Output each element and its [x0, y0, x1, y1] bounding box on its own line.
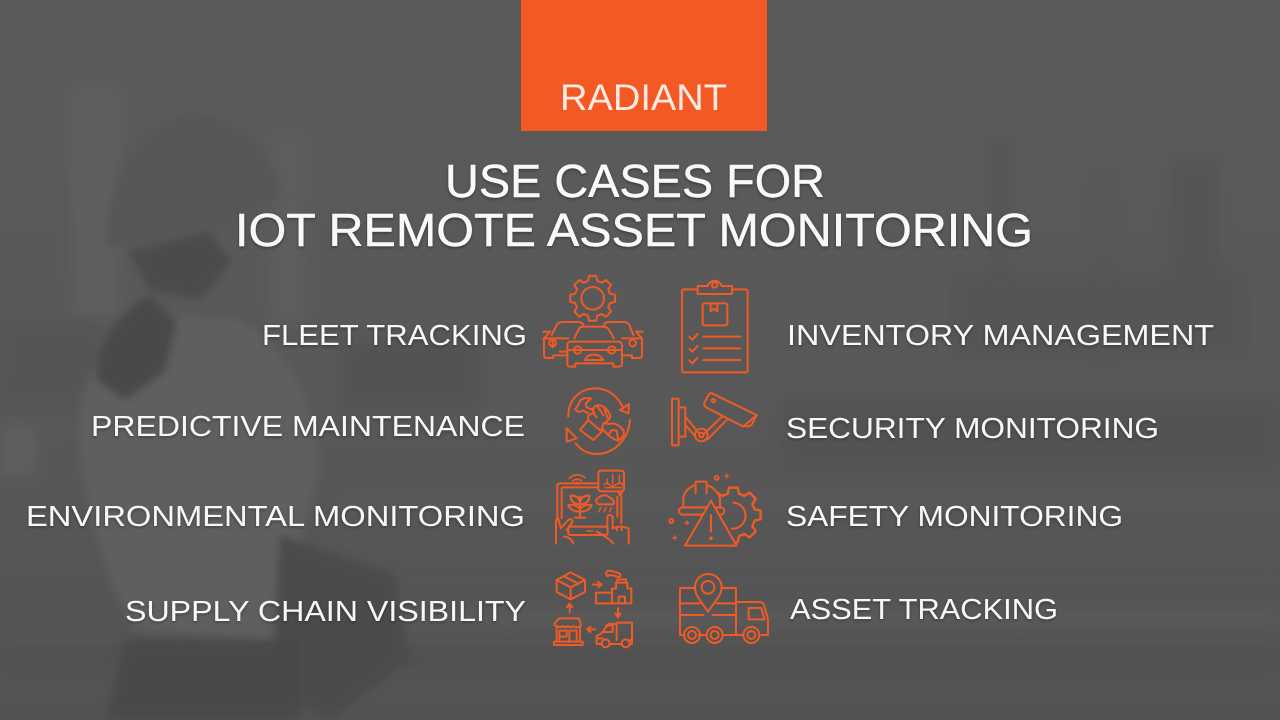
- label: security monitoring: SECURITY MONITORING: [786, 413, 1159, 445]
- icon: supply chain loop: [554, 571, 632, 647]
- logo wordmark: RADIANT: [560, 77, 727, 118]
- label: fleet tracking: FLEET TRACKING: [262, 320, 527, 352]
- label: predictive maintenance: PREDICTIVE MAINTENANCE: [91, 411, 525, 443]
- bag: [270, 535, 410, 720]
- icon: predictive maintenance wrench: [567, 388, 630, 454]
- icon: safety hazard: [669, 474, 761, 546]
- trousers: [105, 640, 300, 720]
- icon: asset tracking truck: [680, 574, 768, 643]
- title: [235, 155, 1033, 256]
- label: environmental monitoring: ENVIRONMENTAL MONITORING: [26, 501, 525, 533]
- icon: environmental tablet: [556, 471, 629, 543]
- hair: [97, 295, 177, 400]
- logo panel: [521, 0, 767, 131]
- label: asset tracking: ASSET TRACKING: [790, 594, 1058, 626]
- shirt: [79, 315, 320, 640]
- icon: inventory clipboard: [682, 281, 748, 372]
- title: USE CASES FOR: [445, 155, 825, 207]
- icon: security camera: [672, 393, 757, 445]
- label: supply chain visibility: SUPPLY CHAIN VISIBILITY: [125, 596, 526, 628]
- helmet: [105, 115, 283, 248]
- title: IOT REMOTE ASSET MONITORING: [235, 204, 1033, 256]
- label: safety monitoring: SAFETY MONITORING: [786, 501, 1123, 533]
- label: inventory management: INVENTORY MANAGEMENT: [787, 320, 1214, 352]
- icon: fleet with gear: [543, 276, 643, 367]
